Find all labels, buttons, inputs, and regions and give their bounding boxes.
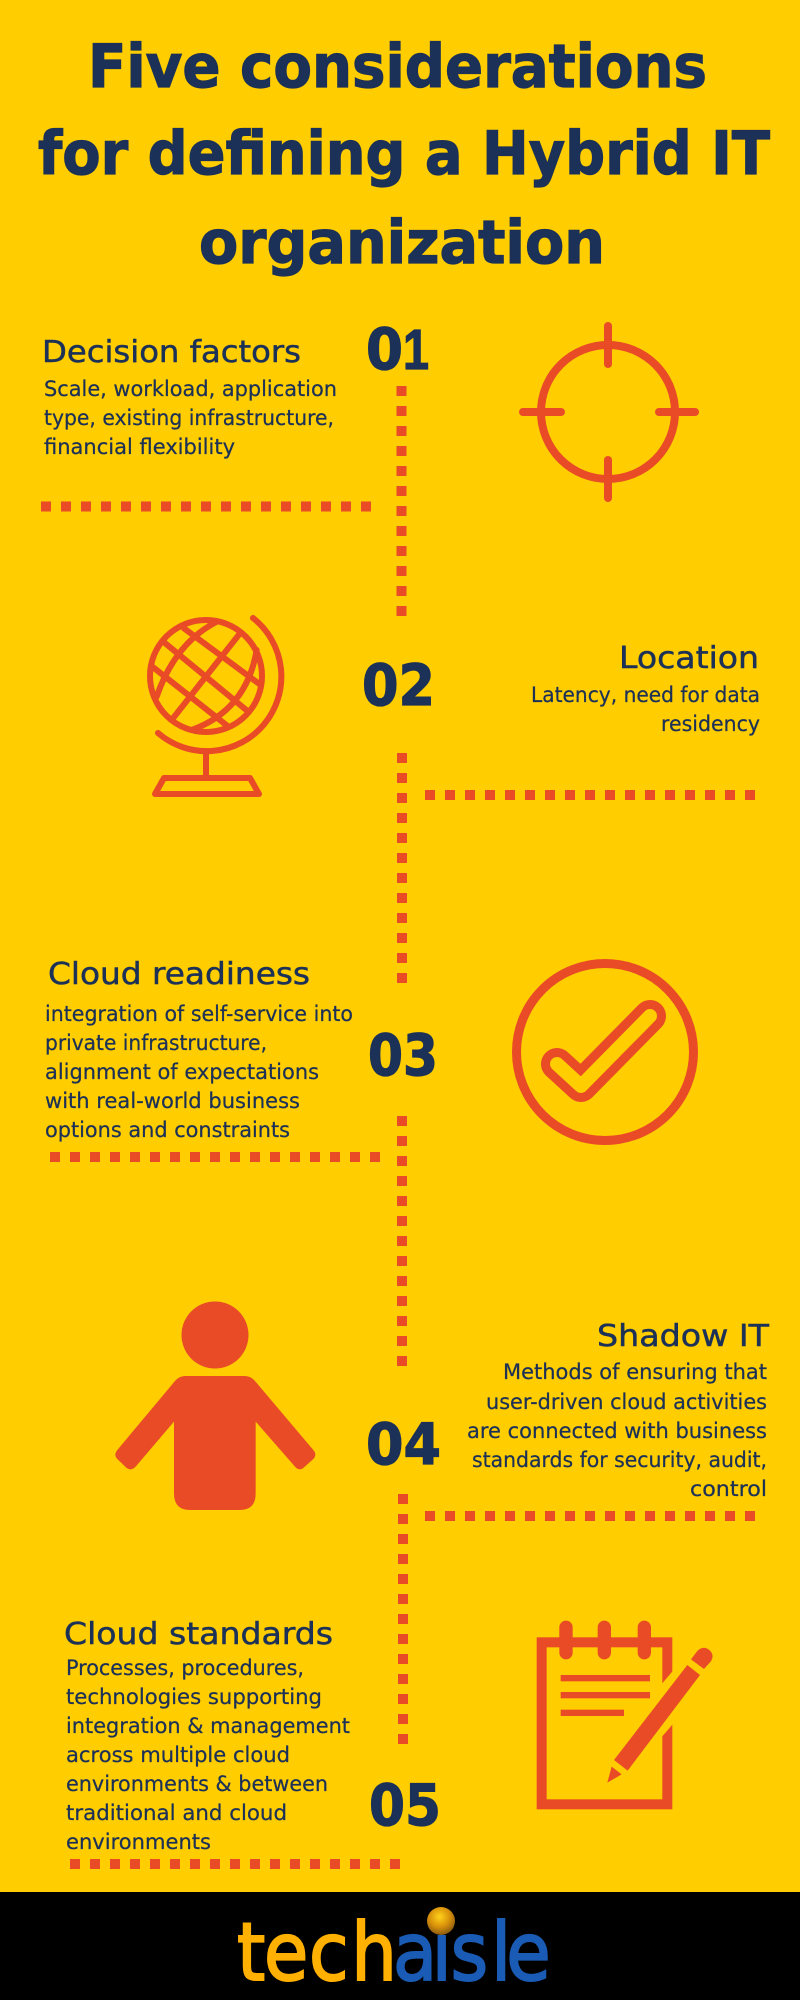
text: cloud standards description bbox=[66, 1656, 350, 1854]
icon: globe bbox=[150, 618, 281, 794]
icon: check mark bbox=[516, 964, 694, 1140]
text: cloud readiness description bbox=[45, 1002, 353, 1142]
text: decision factors description: type, existing infrastructure, bbox=[44, 406, 334, 430]
text: location description bbox=[531, 683, 760, 736]
text: decision factors description: Scale, workload, application bbox=[44, 377, 337, 401]
number 04: 04 bbox=[366, 1412, 441, 1478]
panel: cloud readiness bbox=[45, 957, 694, 1367]
title: Five considerations bbox=[88, 32, 707, 102]
connector: horizontal 5 bbox=[70, 1859, 410, 1869]
text: location description: Latency, need for data bbox=[531, 683, 760, 707]
heading: cloud readiness: Cloud readiness bbox=[48, 957, 310, 992]
text: cloud readiness description: integration of self-service into bbox=[45, 1002, 353, 1026]
panel: shadow IT bbox=[115, 1302, 770, 1745]
text: cloud standards description: environments bbox=[66, 1830, 211, 1854]
icon: logo ball bbox=[427, 1907, 455, 1935]
text: cloud standards description: environments & between bbox=[66, 1772, 328, 1796]
text: decision factors description: financial flexibility bbox=[44, 435, 235, 459]
text: shadow IT description: Methods of ensuring that bbox=[503, 1360, 767, 1384]
heading: shadow IT: Shadow IT bbox=[597, 1319, 770, 1354]
text: cloud standards description: integration & management bbox=[66, 1714, 350, 1738]
number 02: 02 bbox=[362, 653, 435, 719]
heading: location: Location bbox=[619, 641, 759, 676]
text: shadow IT description: are connected with business bbox=[467, 1419, 767, 1443]
number 01: 1 bbox=[403, 318, 429, 382]
text: shadow IT description: user-driven cloud activities bbox=[486, 1390, 767, 1414]
footer band bbox=[0, 1892, 800, 2000]
number 05: 05 bbox=[369, 1773, 441, 1839]
connector: horizontal 3 bbox=[50, 1152, 390, 1162]
title: organization bbox=[199, 208, 605, 278]
connector: horizontal 2 bbox=[425, 790, 765, 800]
number 01 bbox=[366, 317, 429, 383]
connector: vertical 1 bbox=[396, 386, 406, 617]
icon: notepad and pencil bbox=[542, 1621, 713, 1804]
connector: vertical 2 bbox=[397, 753, 407, 984]
number 01: 0 bbox=[366, 317, 403, 383]
heading: cloud standards: Cloud standards bbox=[64, 1617, 333, 1652]
text: location description: residency bbox=[661, 712, 760, 736]
connector: horizontal 4 bbox=[425, 1511, 765, 1521]
connector: horizontal 1 bbox=[41, 502, 381, 512]
connector: vertical 3 bbox=[397, 1116, 407, 1367]
icon: target bbox=[523, 326, 695, 498]
text: cloud readiness description: with real-world business bbox=[45, 1089, 300, 1113]
number 03: 03 bbox=[368, 1023, 438, 1089]
panel: location bbox=[150, 618, 765, 984]
connector: vertical 4 bbox=[398, 1494, 408, 1745]
logo: techaisle bbox=[237, 1905, 551, 1999]
icon: person bbox=[115, 1302, 315, 1510]
text: cloud readiness description: alignment of expectations bbox=[45, 1060, 319, 1084]
text: decision factors description bbox=[44, 377, 337, 459]
logo: techaisle: tech bbox=[237, 1905, 397, 1999]
text: cloud standards description: traditional and cloud bbox=[66, 1801, 287, 1825]
text: shadow IT description bbox=[467, 1360, 767, 1501]
text: cloud standards description: across multiple cloud bbox=[66, 1743, 290, 1767]
logo: techaisle: aisle bbox=[393, 1905, 551, 1999]
text: cloud readiness description: private infrastructure, bbox=[45, 1031, 267, 1055]
text: shadow IT description: standards for security, audit, bbox=[472, 1448, 767, 1472]
text: cloud readiness description: options and constraints bbox=[45, 1118, 290, 1142]
title bbox=[38, 32, 770, 278]
text: shadow IT description: control bbox=[690, 1477, 767, 1501]
panel: decision factors bbox=[41, 317, 695, 617]
panel: cloud standards bbox=[64, 1617, 713, 1864]
heading: decision factors: Decision factors bbox=[42, 335, 301, 370]
text: cloud standards description: technologies supporting bbox=[66, 1685, 322, 1709]
text: cloud standards description: Processes, procedures, bbox=[66, 1656, 304, 1680]
